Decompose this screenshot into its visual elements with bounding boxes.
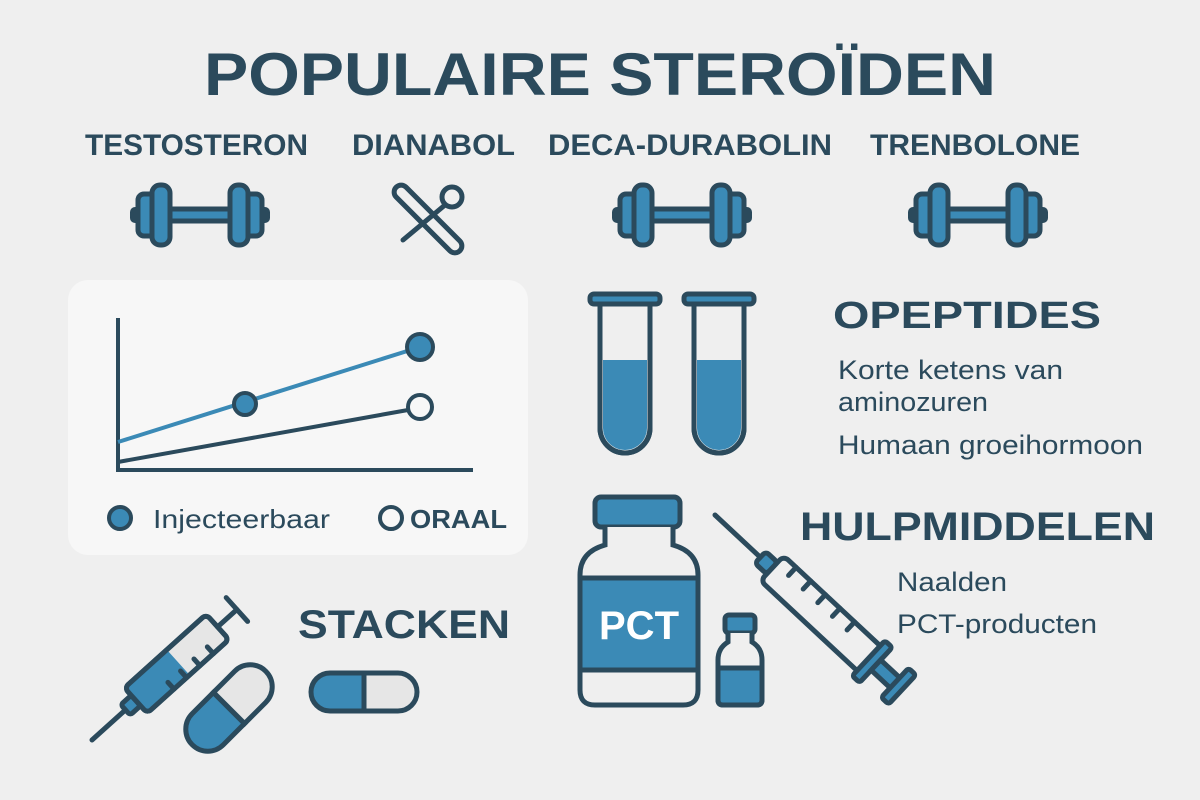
text: hulpmiddelen items: PCT-producten [897, 609, 1097, 639]
line: oraal [118, 395, 432, 462]
icon: dumbbell trenbolone [908, 185, 1048, 245]
text: peptides: Humaan groeihormoon [838, 430, 1143, 460]
heading: peptides: OPEPTIDES [833, 295, 1101, 337]
label: trenbolone: TRENBOLONE [870, 129, 1080, 162]
heading: stacken: STACKEN [298, 603, 510, 647]
legend [109, 504, 507, 534]
icon: horizontal pill [311, 673, 417, 711]
icon: small vial [718, 615, 762, 705]
text: peptides [838, 355, 1143, 460]
text: hulpmiddelen items [897, 567, 1097, 639]
text: peptides: Korte ketens van [838, 355, 1063, 385]
icon: big syringe [699, 497, 919, 707]
legend: ORAAL [410, 504, 507, 534]
label: testosteron: TESTOSTERON [85, 129, 308, 162]
heading: hulpmiddelen: HULPMIDDELEN [800, 505, 1155, 549]
text: peptides: aminozuren [838, 387, 988, 417]
line: injecteerbaar [118, 334, 433, 442]
icon: diagonal pill [177, 656, 281, 760]
icon: PCT bottle [580, 497, 698, 705]
label: deca-durabolin: DECA-DURABOLIN [548, 129, 832, 162]
icon: test tubes [590, 294, 754, 453]
panel: chart [68, 280, 528, 555]
chart axes [118, 318, 473, 470]
icon: small syringe [81, 597, 248, 753]
title: POPULAIRE STEROÏDEN [204, 41, 996, 108]
text: hulpmiddelen items: Naalden [897, 567, 1007, 597]
legend: Injecteerbaar [153, 504, 330, 534]
icon: dianabol tools [391, 182, 465, 256]
label: dianabol: DIANABOL [352, 129, 515, 162]
icon: dumbbell deca [612, 185, 752, 245]
icon: PCT bottle: PCT [599, 604, 679, 648]
icon: dumbbell testosteron [130, 185, 270, 245]
